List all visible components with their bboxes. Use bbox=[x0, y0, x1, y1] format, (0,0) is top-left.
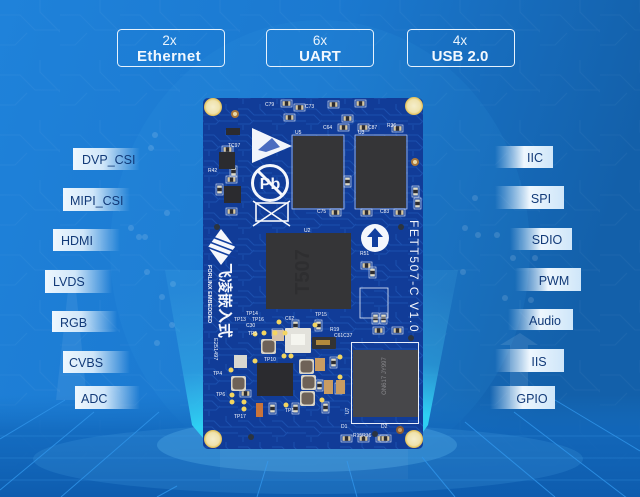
chip: U2 processor: T507 bbox=[292, 249, 314, 295]
label: PWM: PWM bbox=[539, 274, 569, 288]
chip: U3 memory bbox=[355, 130, 407, 209]
feature box: 2x Ethernet: 2x bbox=[162, 33, 177, 48]
silkscreen labels: C79 bbox=[265, 102, 274, 108]
silkscreen: upload arrow bbox=[361, 224, 389, 252]
floor grid bbox=[0, 395, 640, 497]
label: SDIO: SDIO bbox=[532, 233, 563, 247]
label: CVBS: CVBS bbox=[69, 356, 103, 370]
label: RGB: RGB bbox=[60, 316, 87, 330]
silkscreen labels: R19 bbox=[330, 327, 339, 333]
silkscreen labels: TP15 bbox=[315, 312, 327, 318]
chip: U5 memory: U5 bbox=[295, 130, 302, 136]
silkscreen labels: C73 bbox=[305, 104, 314, 110]
brand text: E251497 bbox=[212, 338, 218, 360]
silkscreen labels: D2 bbox=[381, 424, 388, 430]
feature box: 4x USB 2.0: 4x bbox=[453, 33, 467, 48]
chip: U7 emmc: U7 bbox=[345, 407, 351, 414]
feature box: 6x UART bbox=[266, 30, 374, 66]
mounting holes bbox=[204, 97, 423, 448]
label: HDMI bbox=[53, 229, 120, 251]
brand text: FORLINX EMBEDDED bbox=[206, 265, 212, 323]
silkscreen labels: TP6 bbox=[216, 392, 225, 398]
label: IIS bbox=[495, 349, 564, 372]
feature box: 4x USB 2.0 bbox=[408, 30, 514, 66]
silkscreen labels: R36 bbox=[387, 123, 396, 129]
label: GPIO: GPIO bbox=[516, 392, 548, 406]
silkscreen labels: TP10 bbox=[264, 357, 276, 363]
label: SPI: SPI bbox=[531, 192, 551, 206]
label: DVP_CSI: DVP_CSI bbox=[82, 153, 136, 167]
silkscreen: no-lead mark: Pb bbox=[260, 176, 280, 193]
label: IIS: IIS bbox=[531, 355, 547, 369]
silkscreen: no-lead mark bbox=[252, 166, 288, 200]
chip: U7 emmc: ON617 JY997 bbox=[382, 356, 388, 395]
silkscreen labels: C30 bbox=[246, 323, 255, 329]
chip: U5 memory bbox=[292, 130, 344, 209]
silkscreen labels: C62 bbox=[285, 316, 294, 322]
silkscreen labels: TP17 bbox=[234, 414, 246, 420]
chip: power management bbox=[257, 363, 293, 396]
label: IIC: IIC bbox=[527, 151, 543, 165]
label: PWM bbox=[515, 268, 581, 291]
silkscreen labels: TP1 bbox=[285, 408, 294, 414]
silkscreen labels: R15R16 bbox=[353, 433, 372, 439]
label: LVDS bbox=[45, 270, 112, 293]
chip: U7 emmc bbox=[345, 342, 418, 424]
label: MIPI_CSI bbox=[63, 188, 130, 211]
label: DVP_CSI bbox=[73, 148, 140, 170]
silkscreen labels: C64 bbox=[323, 125, 332, 131]
silkscreen: warning triangle bbox=[252, 128, 292, 163]
pcb substrate bbox=[203, 98, 423, 449]
test points bbox=[228, 320, 342, 412]
silkscreen labels: TP4 bbox=[213, 371, 222, 377]
brand text: 飞凌嵌入式 bbox=[216, 263, 234, 338]
label: ADC bbox=[75, 386, 140, 409]
core board bbox=[203, 97, 423, 479]
label: GPIO bbox=[490, 386, 555, 409]
silkscreen labels: TP5 bbox=[248, 331, 257, 337]
feature box: 6x UART: 6x bbox=[313, 33, 327, 48]
silkscreen labels: C87 bbox=[368, 125, 377, 131]
chip: U2 processor: U2 bbox=[304, 228, 311, 234]
label: HDMI: HDMI bbox=[61, 234, 93, 248]
board reflection bbox=[220, 449, 408, 479]
silkscreen labels: C75 bbox=[317, 209, 326, 215]
silkscreen labels: R42 bbox=[208, 168, 217, 174]
label: IIC bbox=[495, 146, 553, 168]
silkscreen labels: D1 bbox=[341, 424, 348, 430]
label: CVBS bbox=[63, 351, 130, 373]
label: MIPI_CSI: MIPI_CSI bbox=[70, 194, 124, 208]
brand text bbox=[206, 263, 234, 360]
silkscreen labels: TP16 bbox=[252, 317, 264, 323]
model text: FETT507-C V1.0 bbox=[407, 220, 421, 333]
silkscreen labels: TC97 bbox=[228, 143, 240, 149]
label: SPI bbox=[495, 186, 564, 209]
silkscreen labels: TP13 bbox=[234, 317, 246, 323]
label: LVDS: LVDS bbox=[53, 275, 85, 289]
silkscreen labels: R51 bbox=[360, 251, 369, 257]
glow beams beside board bbox=[56, 270, 538, 438]
silkscreen labels: C83 bbox=[380, 209, 389, 215]
label: Audio: Audio bbox=[529, 314, 561, 328]
silkscreen labels: C61C37 bbox=[334, 333, 353, 339]
label: SDIO bbox=[510, 228, 572, 250]
small vias bbox=[214, 110, 419, 440]
silkscreen: recycle bin mark bbox=[253, 201, 290, 226]
feature box: 2x Ethernet: Ethernet bbox=[137, 48, 201, 65]
smd components bbox=[216, 100, 421, 442]
silkscreen labels: TP14 bbox=[246, 311, 258, 317]
silkscreen labels bbox=[208, 102, 396, 439]
logo: forlinx bbox=[207, 229, 236, 265]
chip: U3 memory: U3 bbox=[358, 130, 365, 136]
feature box: 4x USB 2.0: USB 2.0 bbox=[432, 48, 488, 65]
label: RGB bbox=[52, 311, 117, 332]
feature box: 2x Ethernet bbox=[118, 30, 224, 66]
chip: U2 processor bbox=[266, 228, 351, 309]
feature box: 6x UART: UART bbox=[299, 48, 341, 65]
label: Audio bbox=[508, 309, 573, 330]
label: ADC: ADC bbox=[81, 392, 107, 406]
